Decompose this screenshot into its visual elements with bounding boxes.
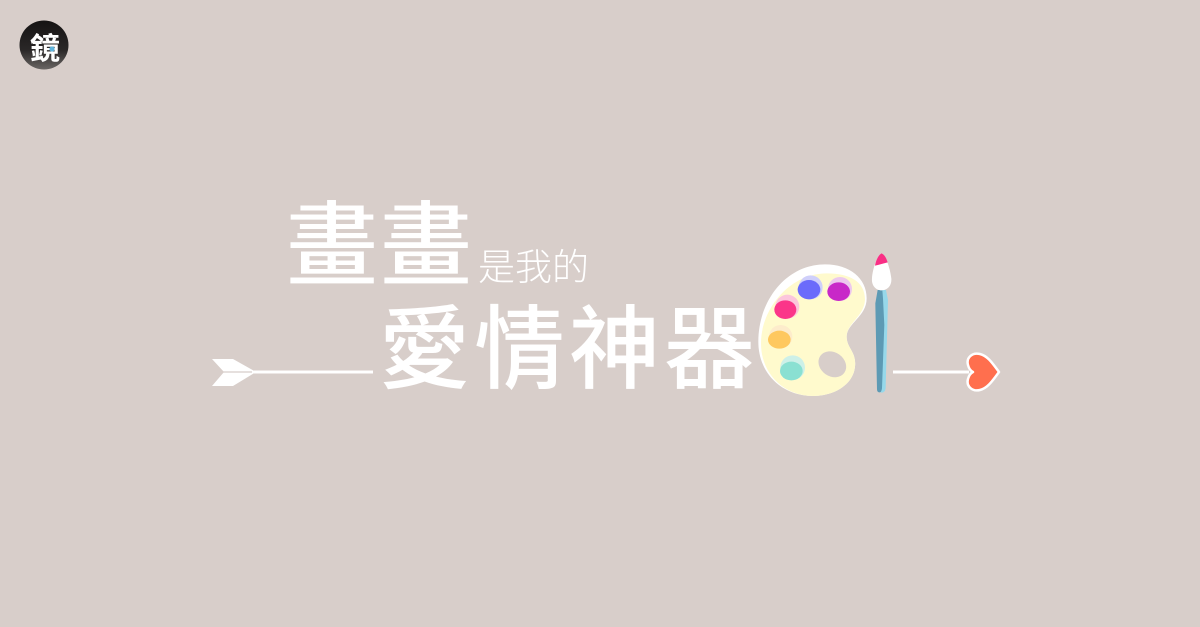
- paint: orange: [768, 325, 792, 349]
- logo: mirror media badge: [20, 20, 68, 70]
- paint: blue: [798, 275, 823, 299]
- icon: paint palette: [758, 264, 867, 396]
- paint: pink: [774, 295, 799, 319]
- icon: paint brush: [872, 253, 891, 393]
- palette thumb hole: [813, 346, 851, 383]
- title: first line large characters: 畫畫: [286, 196, 474, 298]
- title: small connecting characters: 是我的: [478, 247, 589, 288]
- paint: teal: [780, 355, 805, 380]
- arrow: feathered tail and shaft: [212, 359, 373, 386]
- logo: mirror media badge: 鏡: [30, 33, 60, 66]
- arrow: line to heart: [893, 354, 999, 390]
- paint: purple: [827, 277, 852, 301]
- title: second line large characters: 愛情神器: [379, 300, 759, 401]
